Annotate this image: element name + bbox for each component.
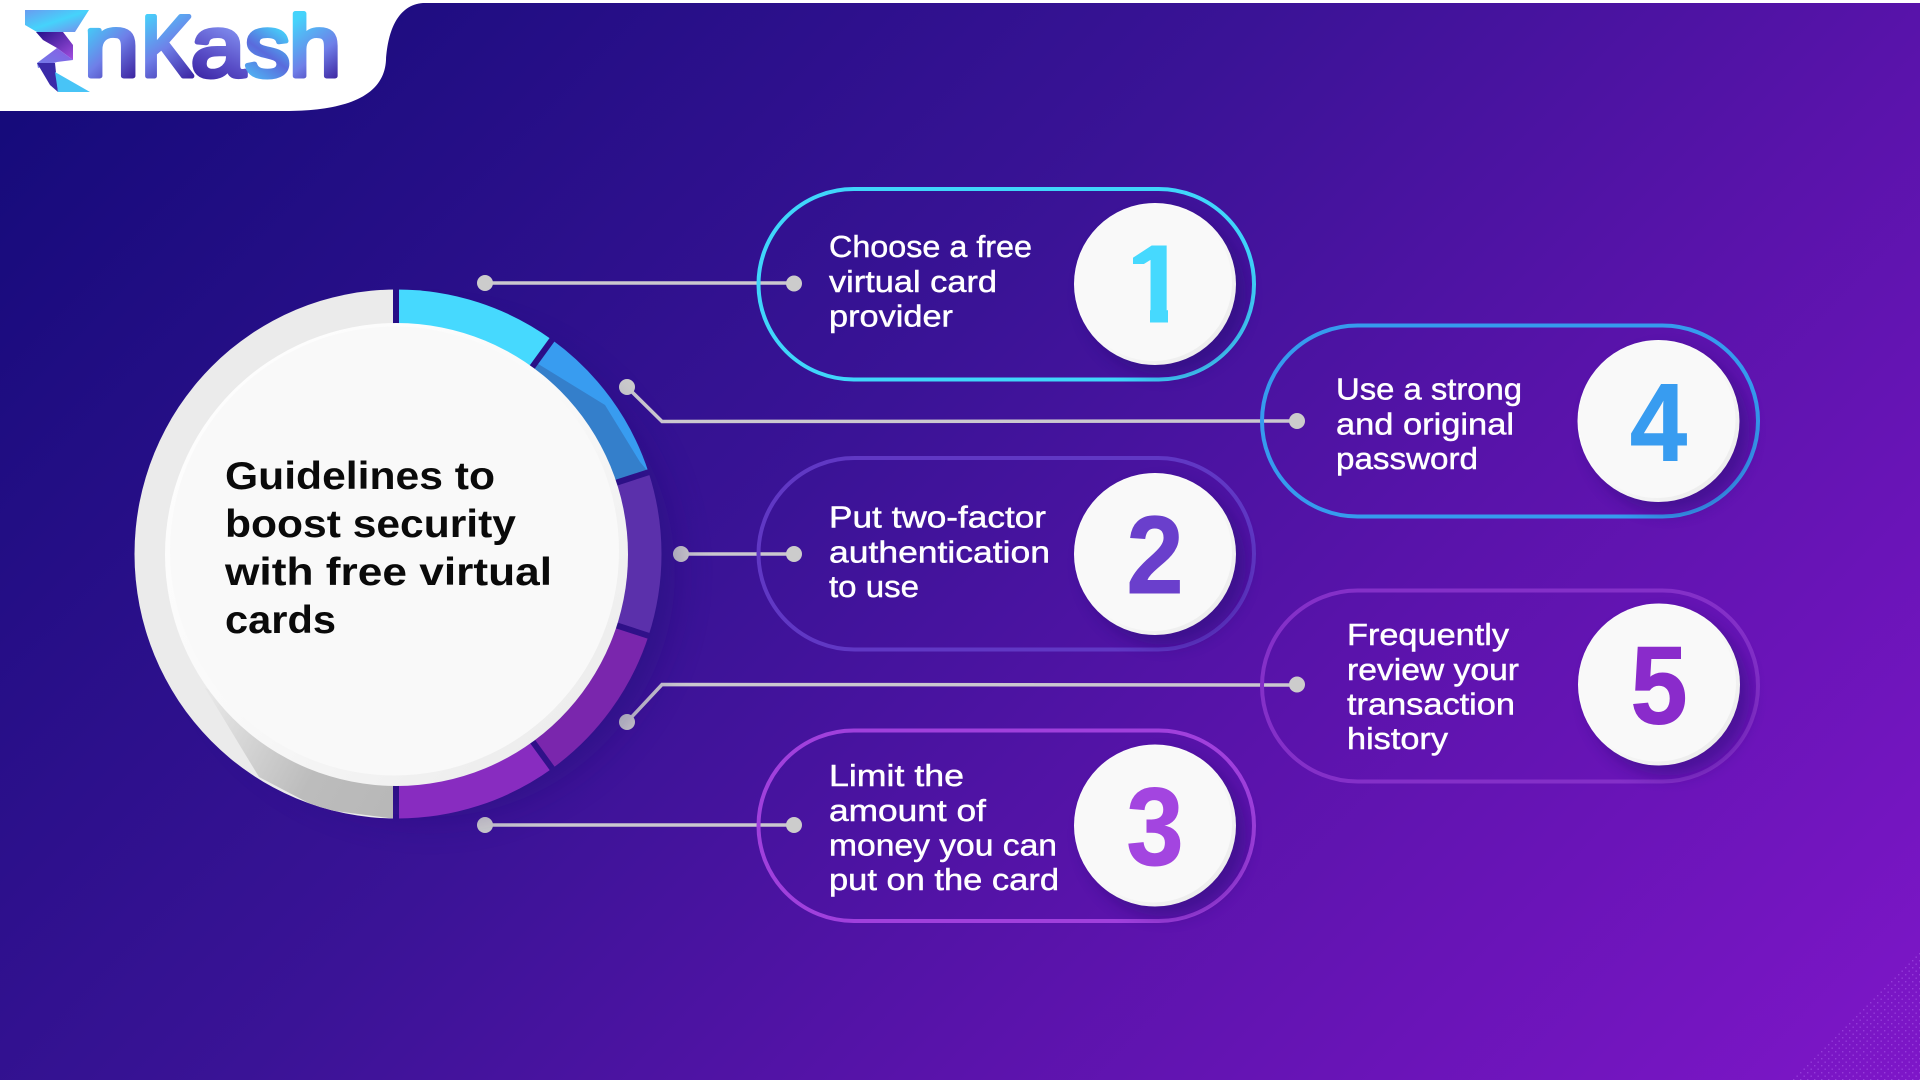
ring: neutral left half <box>135 290 397 818</box>
number 5: 5 <box>1630 624 1688 748</box>
text: step 1 <box>829 230 1032 334</box>
text: step 4: Use a strong <box>1336 372 1522 406</box>
number 4: 4 <box>1630 362 1687 484</box>
connector 3 <box>477 817 802 833</box>
text: step 4: password <box>1336 442 1478 476</box>
ring: lower-left shadow <box>217 704 393 818</box>
text: step 1: Choose a free <box>829 230 1032 264</box>
logo: EnKash: n <box>84 0 139 95</box>
text: step 2: authentication <box>829 536 1050 570</box>
panel: step 2 <box>758 458 1254 650</box>
text: step 2: to use <box>829 570 919 604</box>
panel: step 1 <box>758 189 1254 380</box>
ring segment 2 inner shade <box>396 362 648 554</box>
heading: boost security <box>225 503 516 546</box>
panel: step 5 <box>1262 590 1758 782</box>
text: step 3 <box>829 759 1059 897</box>
text: step 5: transaction <box>1347 688 1515 722</box>
text: step 5: history <box>1347 722 1449 756</box>
panel: step 4 <box>1262 326 1758 516</box>
ring segment 2 blue <box>396 340 648 554</box>
text: step 2: Put two-factor <box>829 500 1046 534</box>
panel: step 3 <box>758 730 1254 921</box>
heading: Guidelines to <box>225 455 495 498</box>
text: step 2 <box>829 500 1050 604</box>
central ring <box>135 289 675 819</box>
connector 1 <box>477 275 802 292</box>
connector 5 <box>619 676 1305 730</box>
text: step 5: review your <box>1347 653 1519 687</box>
text: step 3: Limit the <box>829 759 964 793</box>
text: step 3: put on the card <box>829 863 1059 897</box>
logo: EnKash: h <box>289 0 341 95</box>
ring segment 1 cyan <box>396 289 552 554</box>
text: step 4 <box>1336 372 1522 476</box>
ring segment 4 purple <box>396 554 648 768</box>
number 2: 2 <box>1126 494 1184 617</box>
ring segment 5 violet <box>399 744 550 818</box>
heading <box>224 455 552 642</box>
central disc <box>165 323 628 786</box>
text: step 4: and original <box>1336 408 1514 442</box>
text: step 5: Frequently <box>1347 618 1510 652</box>
logo: EnKash: s <box>245 0 290 95</box>
text: step 1: virtual card <box>829 265 997 299</box>
logo: EnKash: K <box>141 0 193 95</box>
ring segment 3 indigo <box>396 472 661 636</box>
text: step 5 <box>1347 618 1519 756</box>
heading: with free virtual <box>224 551 552 594</box>
text: step 1: provider <box>829 300 953 334</box>
logo panel <box>0 0 1920 111</box>
number 3: 3 <box>1126 766 1184 889</box>
text: step 3: money you can <box>829 828 1057 862</box>
connector 4 <box>619 379 1305 429</box>
number 1: 1 <box>1125 223 1187 346</box>
logo: EnKash <box>25 0 341 95</box>
heading: cards <box>225 599 336 642</box>
logo: EnKash: a <box>191 0 245 95</box>
text: step 3: amount of <box>829 794 987 828</box>
connector 2 <box>673 546 802 562</box>
